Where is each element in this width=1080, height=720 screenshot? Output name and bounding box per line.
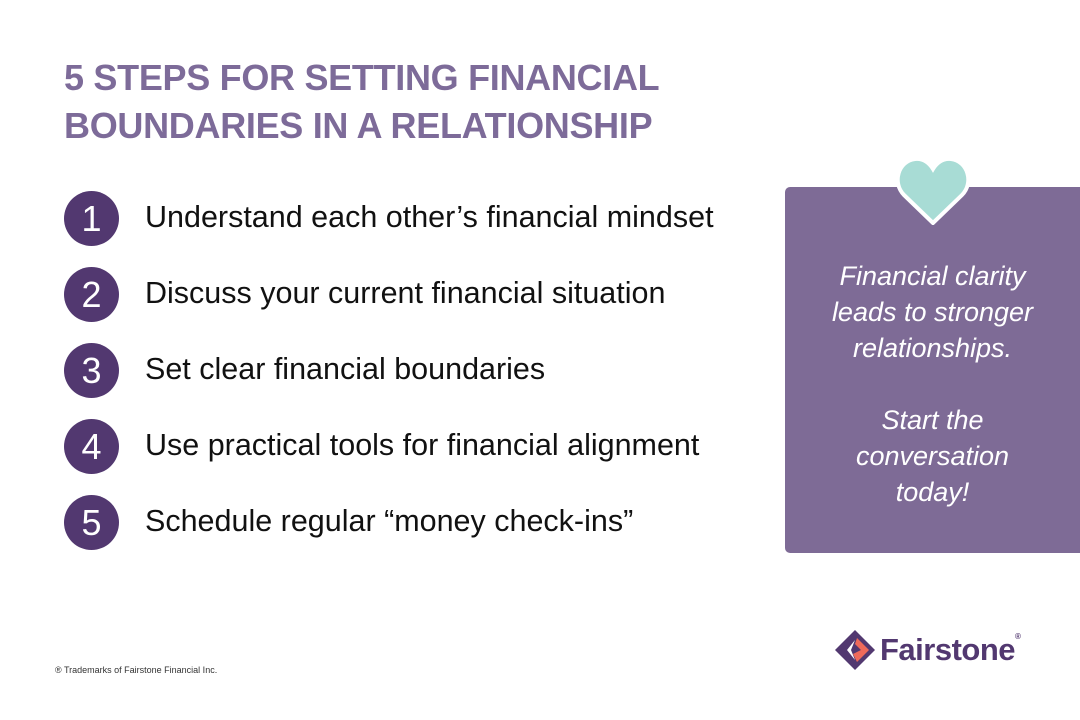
step 3: 3	[81, 350, 102, 391]
title	[64, 57, 659, 146]
icon: heart	[897, 160, 969, 225]
step 4	[64, 419, 700, 474]
step 5: 5	[81, 502, 102, 543]
step 4: Use practical tools for financial alignment	[145, 428, 699, 462]
quote text: Start the	[881, 405, 984, 435]
step 5	[64, 495, 633, 550]
title: 5 STEPS FOR SETTING FINANCIAL	[64, 57, 659, 98]
logo: Fairstone: Fairstone®	[880, 632, 1020, 667]
step 2	[64, 267, 665, 322]
quote text: leads to stronger	[832, 297, 1033, 327]
step 2: Discuss your current financial situation	[145, 276, 665, 310]
step 3: Set clear financial boundaries	[145, 352, 545, 386]
quote text: conversation	[856, 441, 1009, 471]
step 5: Schedule regular “money check-ins”	[145, 504, 633, 538]
panel: quote box	[785, 187, 1080, 553]
step 3	[64, 343, 545, 398]
quote text: today!	[896, 477, 969, 507]
quote text: Financial clarity	[839, 261, 1026, 291]
quote text	[832, 261, 1034, 507]
logo: Fairstone	[835, 630, 1021, 670]
step 2: 2	[81, 274, 102, 315]
title: BOUNDARIES IN A RELATIONSHIP	[64, 105, 652, 146]
step 1	[64, 191, 714, 246]
step 4: 4	[81, 426, 102, 467]
footnote: ® Trademarks of Fairstone Financial Inc.	[55, 665, 217, 675]
step 1: Understand each other’s financial mindset	[145, 200, 714, 234]
quote text: relationships.	[853, 333, 1012, 363]
step 1: 1	[81, 198, 102, 239]
